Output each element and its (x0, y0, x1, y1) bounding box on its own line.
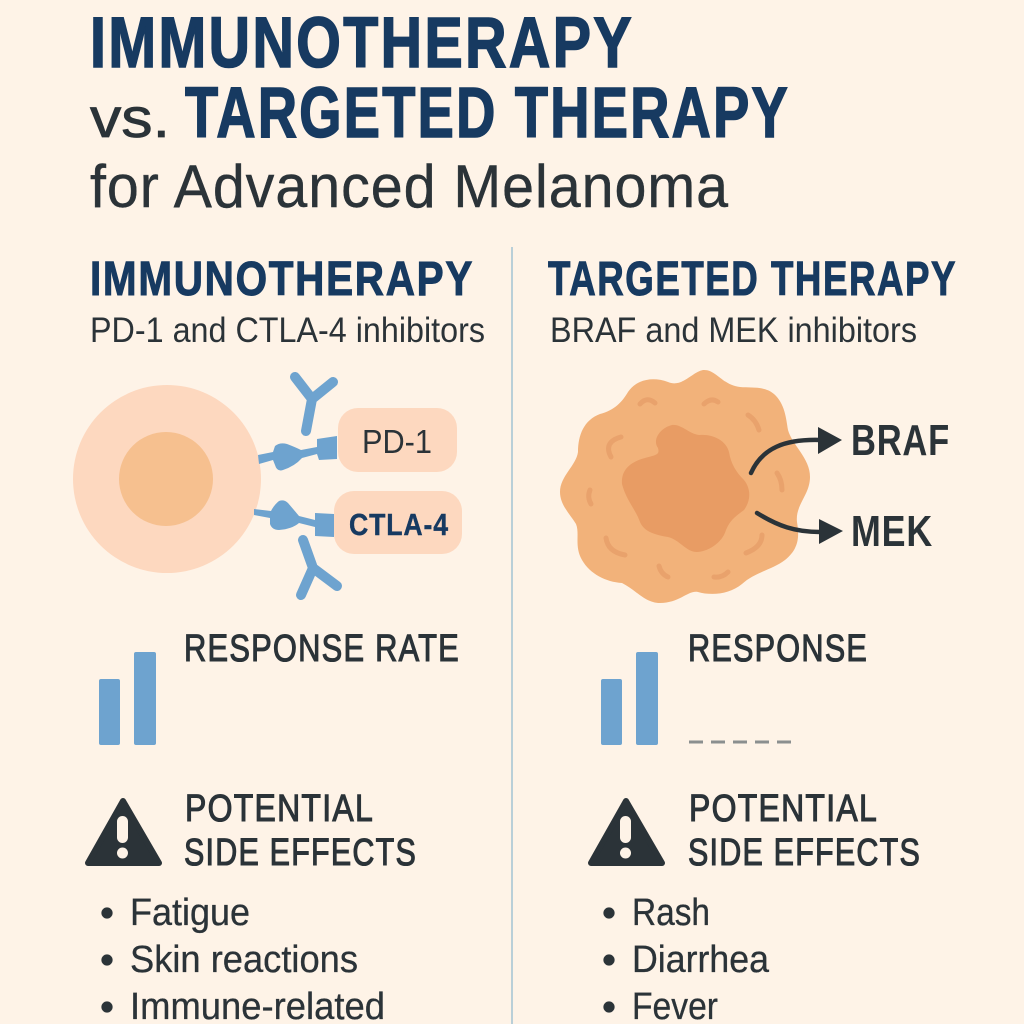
response heading: RESPONSE (688, 628, 868, 670)
side effects heading (184, 788, 417, 874)
icon: antibody top (295, 377, 333, 431)
side effects list (102, 892, 385, 1024)
bar chart: response (601, 652, 658, 745)
label: CTLA-4 (334, 491, 462, 554)
side effects list: Skin reactions (130, 939, 358, 981)
arrow: to MEK (757, 513, 843, 544)
immunotherapy heading: IMMUNOTHERAPY (90, 253, 474, 306)
response rate heading: RESPONSE RATE (184, 628, 460, 670)
side effects list: Diarrhea (632, 939, 770, 981)
side effects heading (688, 788, 921, 874)
label: PD-1 (338, 408, 457, 472)
bar chart: response rate (99, 652, 156, 745)
dashed placeholder (689, 740, 793, 744)
label: CTLA-4: CTLA-4 (349, 507, 449, 542)
panel: targeted therapy (548, 253, 957, 1024)
targeted therapy subheading: BRAF and MEK inhibitors (550, 311, 917, 350)
panel: immunotherapy (73, 253, 485, 1024)
tumor speckles (589, 400, 782, 577)
side effects list: Fatigue (130, 892, 250, 934)
icon: tumor cell (560, 370, 810, 603)
title (90, 4, 790, 220)
immunotherapy subheading: PD-1 and CTLA-4 inhibitors (90, 311, 485, 350)
arrow: to BRAF (751, 427, 842, 473)
side effects list (604, 892, 770, 1024)
icon: antibody bottom (301, 540, 337, 595)
side effects heading: POTENTIAL (185, 788, 374, 830)
side effects heading: SIDE EFFECTS (184, 832, 417, 874)
center divider (511, 247, 513, 1024)
label: PD-1: PD-1 (362, 423, 432, 460)
icon: warning triangle (591, 801, 662, 863)
title: TARGETED THERAPY (185, 74, 790, 153)
icon: immune cell (73, 385, 261, 573)
side effects heading: SIDE EFFECTS (688, 832, 921, 874)
side effects list: Rash (632, 892, 710, 934)
icon: receptor CTLA-4 link (254, 500, 334, 537)
side effects heading: POTENTIAL (689, 788, 878, 830)
label: BRAF: BRAF (851, 416, 950, 465)
label: MEK: MEK (851, 507, 933, 556)
icon: receptor PD-1 link (258, 436, 337, 470)
title: for Advanced Melanoma (90, 153, 729, 220)
icon: warning triangle (88, 801, 159, 863)
title: vs. (90, 86, 170, 149)
title: IMMUNOTHERAPY (90, 4, 634, 83)
